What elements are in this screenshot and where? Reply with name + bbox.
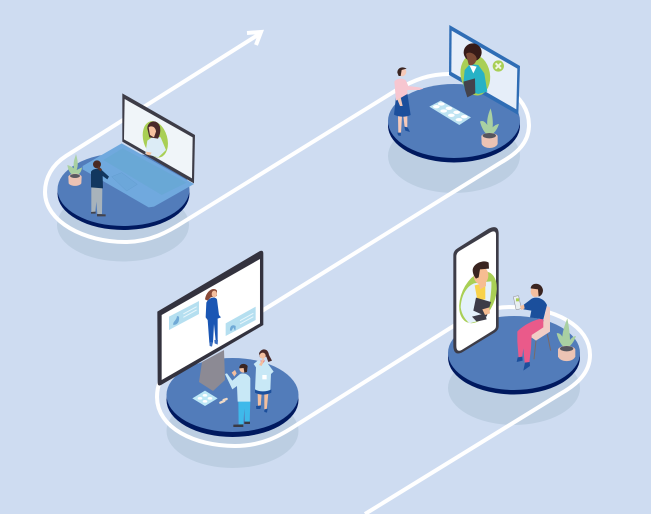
stop 4: phone consultation bbox=[448, 227, 580, 394]
keypad bbox=[429, 101, 471, 125]
large monitor bbox=[157, 251, 263, 385]
smartphone bbox=[452, 227, 504, 354]
plant 1 bbox=[67, 154, 82, 186]
person with dark jacket bbox=[91, 160, 109, 216]
medical pad bbox=[192, 391, 227, 406]
disc shadows bbox=[57, 119, 580, 468]
doctor on monitor bbox=[457, 43, 493, 98]
patient figure on screen bbox=[205, 289, 221, 347]
monitor stand bbox=[199, 350, 225, 391]
female doctor bbox=[254, 349, 274, 413]
stop 3: large screen body review bbox=[157, 251, 298, 437]
stop 2: monitor consultation bbox=[388, 25, 520, 162]
wall monitor bbox=[449, 25, 520, 115]
platform 1 bbox=[58, 153, 190, 230]
platform 4 bbox=[448, 316, 580, 394]
pills bbox=[220, 399, 227, 403]
platform 2 bbox=[388, 84, 520, 162]
male doctor bbox=[225, 364, 250, 427]
info panel right bbox=[226, 307, 256, 336]
platform 3 bbox=[166, 358, 298, 437]
plant 2 bbox=[480, 108, 499, 148]
medical cross badge bbox=[493, 60, 504, 72]
doctor on laptop screen bbox=[139, 118, 172, 161]
info panel left bbox=[169, 301, 199, 330]
woman in pink blouse bbox=[394, 67, 423, 136]
seated woman bbox=[513, 284, 547, 371]
stop 1: laptop consultation bbox=[58, 93, 195, 230]
laptop bbox=[83, 93, 195, 207]
white journey path bbox=[45, 33, 590, 514]
chair bbox=[529, 306, 551, 359]
doctor on phone bbox=[452, 261, 504, 329]
plant 4 bbox=[557, 318, 576, 361]
arrow head bbox=[247, 32, 261, 45]
